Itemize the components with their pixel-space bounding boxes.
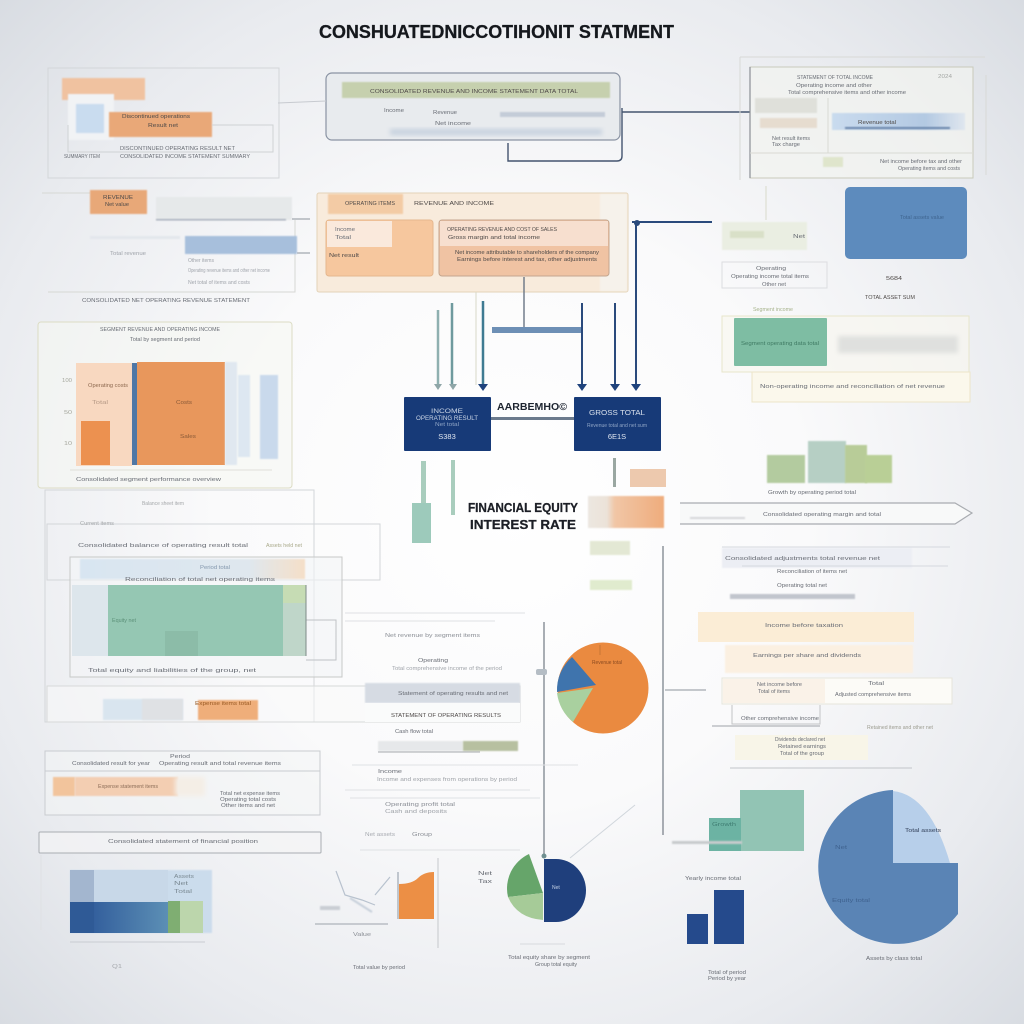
panel: lower left orange row: Operating total costs (220, 797, 277, 803)
panel: right small summary: Other net (762, 282, 787, 288)
arrow: long right banner: Consolidated operating margin and total (763, 512, 881, 518)
chart: small line and orange block: Value (353, 932, 371, 938)
panel: left revenue block: CONSOLIDATED NET OPERATING REVENUE STATEMENT (82, 298, 250, 304)
connector: summary to right panel (278, 101, 750, 161)
chart: orange pie: Revenue total (592, 660, 622, 666)
panel: left nested green table: Reconciliation of total net operating items (125, 577, 276, 583)
heading: centre financial heading (468, 501, 579, 532)
panel: left revenue block: REVENUE (103, 195, 134, 201)
panel: central income statement: Total (335, 235, 351, 241)
panel: navy card left (404, 397, 491, 451)
panel: left revenue block: Net value (105, 202, 129, 208)
panel: lower left blue chart: Net (174, 881, 189, 887)
panel: centre text block: Total comprehensive income of the period (392, 666, 502, 672)
panel: left stacked bar chart: 50 (64, 410, 72, 416)
panel: right stacked cream rows: Total of items (758, 689, 791, 695)
panel: right blue card (845, 187, 967, 259)
panel: navy card left: OPERATING RESULT (416, 416, 478, 422)
panel: right text lines: Operating total net (777, 583, 828, 589)
panel: top right statement: Tax charge (772, 142, 800, 148)
panel: lower centre text: Income and expenses from operations by period (377, 777, 517, 783)
heading: centre financial heading: FINANCIAL EQUITY (468, 501, 579, 515)
panel: lower left orange row: Operating result and total revenue items (159, 761, 282, 767)
panel: left stacked bar chart: SEGMENT REVENUE AND OPERATING INCOME (100, 327, 221, 333)
panel: central income statement: Income (335, 227, 355, 233)
panel: top right statement: Net result items (772, 136, 811, 142)
panel: top right statement: Operating items and costs (898, 166, 961, 172)
title: CONSHUATEDNICCOTIHONIT STATMENT (319, 22, 674, 42)
panel: right soft green bars (767, 441, 892, 496)
panel: top centre summary: Revenue (433, 110, 457, 116)
panel: left stacked bar chart: Consolidated segment performance overview (76, 477, 222, 483)
panel: left nested green table: Period total (200, 565, 230, 571)
panel: centre text block: Cash flow total (395, 729, 433, 735)
panel: right stacked cream rows: Other comprehensive income (741, 716, 819, 722)
chart: navy bars: Period by year (708, 976, 746, 982)
chart: navy bars: Total of period (708, 970, 746, 976)
panel: navy card left: INCOME (431, 409, 463, 415)
chart: navy and green pie: Tax (478, 879, 493, 885)
panel: right text lines (722, 547, 950, 599)
panel: lower left orange row (45, 751, 320, 815)
panel: right small summary: Operating income total items (731, 274, 810, 280)
panel: left nested green table: Consolidated balance of operating result total (78, 543, 248, 549)
panel: central income statement: REVENUE AND INCOME (414, 201, 495, 207)
chart: orange pie (557, 642, 648, 734)
panel: left stacked bar chart: 100 (62, 378, 72, 384)
panel: centre text block: Operating (418, 658, 448, 664)
panel: lower left blue chart (39, 832, 321, 970)
panel: right small summary (722, 186, 915, 301)
panel: right small summary: Net (793, 234, 806, 240)
panel: central income statement: Gross margin and total income (448, 235, 540, 241)
panel: top left statement: DISCONTINUED OPERATING RESULT NET (120, 146, 235, 152)
panel: top right statement: STATEMENT OF TOTAL INCOME (797, 75, 874, 81)
panel: lower left blue chart: Total (174, 889, 192, 895)
panel: left revenue block: Net total of items and costs (188, 280, 251, 286)
panel: top centre summary: Income (384, 108, 404, 114)
panel: lower centre text: Cash and deposits (385, 809, 448, 815)
panel: lower centre text: Operating profit total (385, 802, 455, 808)
panel: navy card left: Net total (435, 422, 459, 428)
panel: top centre summary: Net income (435, 121, 471, 127)
chart: small line and orange block (315, 871, 434, 971)
panel: central income statement (317, 193, 628, 292)
panel: left nested green table: Balance sheet item (142, 501, 184, 507)
panel: right blue card: Total assets value (900, 215, 944, 221)
panel: right text lines: Consolidated adjustments total revenue net (725, 556, 881, 562)
panel: lower left orange row: Consolidated result for year (72, 761, 150, 767)
panel: right small summary: Operating (756, 266, 786, 272)
panel: lower centre text (345, 765, 578, 850)
panel: left nested green table: Total equity and liabilities of the group, net (88, 668, 257, 674)
panel: left revenue block: Total revenue (110, 251, 146, 257)
chart: navy and green pie: Net (552, 885, 560, 891)
chart: small line and orange block: Total value by period (353, 965, 405, 971)
panel: left nested green table (45, 490, 520, 722)
chart: teal steps (672, 790, 804, 851)
panel: central income statement: OPERATING REVENUE AND COST OF SALES (447, 227, 558, 233)
panel: right green statement (722, 307, 970, 402)
panel: right green statement: Segment income (753, 307, 793, 313)
panel: navy card right: 6E1S (608, 432, 626, 441)
chart: teal steps: Growth (712, 822, 736, 828)
panel: right soft green bars: Growth by operating period total (768, 490, 856, 496)
chart: navy and green pie: Total equity share by segment (508, 955, 591, 961)
label: navy cards connector (491, 402, 574, 420)
panel: lower left blue chart: Consolidated statement of financial position (108, 839, 258, 845)
panel: right stacked cream rows: Total (868, 681, 884, 687)
chart: large blue pie (818, 790, 958, 962)
panel: top left statement (48, 68, 279, 178)
panel: centre text block: STATEMENT OF OPERATING RESULTS (391, 713, 502, 719)
panel: left nested green table: Assets held net (266, 543, 303, 549)
panel: centre text block: Net revenue by segment items (385, 633, 481, 639)
panel: central income statement: Earnings before interest and tax, other adjustments (457, 257, 598, 263)
panel: right stacked cream rows: Retained earnings (778, 744, 827, 750)
panel: right small summary: 5684 (886, 276, 902, 282)
flow: green column (412, 460, 455, 543)
panel: top right statement: Total comprehensive items and other income (788, 90, 906, 96)
chart: large blue pie: Equity total (832, 898, 870, 904)
panel: top left statement: Result net (148, 123, 179, 129)
panel: lower left orange row: Period (170, 754, 190, 760)
panel: left revenue block (42, 190, 310, 304)
panel: left stacked bar chart (38, 322, 292, 488)
panel: right stacked cream rows: Retained items and other net (867, 725, 934, 731)
panel: navy card right (574, 397, 661, 451)
panel: left stacked bar chart: Operating costs (88, 383, 129, 389)
panel: lower centre text: Net assets (365, 832, 396, 838)
panel: right green statement: Non-operating income and reconciliation of net revenue (760, 384, 945, 390)
panel: top centre summary: CONSOLIDATED REVENUE AND INCOME STATEMENT DATA TOTAL (370, 89, 578, 95)
flow lines: centre connectors (434, 220, 712, 391)
chart: navy and green pie: Group total equity (535, 962, 578, 968)
flow lines: lower centre (438, 546, 706, 948)
panel: left stacked bar chart: Total (92, 400, 108, 406)
panel: top right statement: Revenue total (858, 120, 896, 126)
panel: top right statement: Net income before tax and other (880, 159, 962, 165)
panel: left stacked bar chart: Total by segment and period (130, 337, 200, 343)
panel: orange mini boxes (588, 458, 666, 590)
panel: left nested green table: Expense items total (195, 701, 251, 707)
panel: lower left orange row: Total net expense items (220, 791, 281, 797)
panel: navy card right: GROSS TOTAL (589, 410, 645, 417)
panel: central income statement: OPERATING ITEMS (345, 201, 396, 207)
panel: right stacked cream rows: Adjusted comprehensive items (835, 692, 912, 698)
chart: navy and green pie: Net (478, 871, 493, 877)
label: navy cards connector: AARBEMHO© (497, 402, 568, 413)
panel: left stacked bar chart: Sales (180, 434, 197, 440)
panel: lower centre text: Income (378, 769, 402, 775)
chart: large blue pie: Net (835, 845, 848, 851)
panel: lower left orange row: Expense statement items (98, 784, 159, 790)
panel: lower centre text: Group (412, 832, 432, 838)
chart: navy bars: Yearly income total (685, 876, 741, 882)
panel: left revenue block: Other items (188, 258, 214, 264)
panel: lower left blue chart: Q1 (112, 964, 122, 970)
panel: top left statement: CONSOLIDATED INCOME STATEMENT SUMMARY (120, 154, 251, 160)
panel: top left statement: Discontinued operations (122, 114, 191, 120)
panel: right stacked cream rows (698, 612, 952, 768)
panel: right stacked cream rows: Dividends declared net (775, 737, 826, 743)
panel: left nested green table: Equity net (112, 618, 137, 624)
arrow: long right banner (680, 503, 972, 524)
panel: right small summary: TOTAL ASSET SUM (865, 295, 915, 301)
panel: right text lines: Reconciliation of items net (777, 569, 848, 575)
heading: centre financial heading: INTEREST RATE (470, 518, 576, 532)
chart: navy and green pie (478, 854, 591, 968)
panel: centre text block: Statement of operating results and net (398, 691, 509, 697)
panel: right stacked cream rows: Net income before (757, 682, 802, 688)
panel: right green statement: Segment operating data total (741, 341, 819, 347)
panel: top left statement: SUMMARY ITEM (64, 154, 100, 160)
panel: navy card right: Revenue total and net sum (587, 423, 647, 429)
panel: right stacked cream rows: Earnings per share and dividends (753, 653, 862, 659)
panel: left stacked bar chart: Costs (176, 400, 193, 406)
panel: central income statement: Net income attributable to shareholders of the company (455, 250, 600, 256)
panel: navy card left: S383 (438, 432, 456, 441)
chart: large blue pie: Total assets (905, 828, 941, 834)
chart: large blue pie: Assets by class total (866, 956, 922, 962)
panel: top centre summary (326, 73, 620, 140)
panel: central income statement: Net result (329, 253, 360, 259)
panel: left stacked bar chart: 10 (64, 441, 72, 447)
panel: top right statement (740, 57, 986, 180)
panel: top right statement: 2024 (938, 74, 952, 80)
panel: left nested green table: Current items (80, 521, 115, 527)
panel: top right statement: Operating income and other (796, 83, 872, 89)
panel: right stacked cream rows: Total of the group (780, 751, 824, 757)
panel: lower left blue chart: Assets (174, 874, 195, 880)
panel: left revenue block: Operating revenue items and other net income (188, 268, 270, 274)
chart: navy bars (685, 876, 746, 982)
panel: right stacked cream rows: Income before taxation (765, 623, 843, 629)
panel: centre text block (345, 613, 525, 752)
panel: lower left orange row: Other items and net (221, 803, 276, 809)
